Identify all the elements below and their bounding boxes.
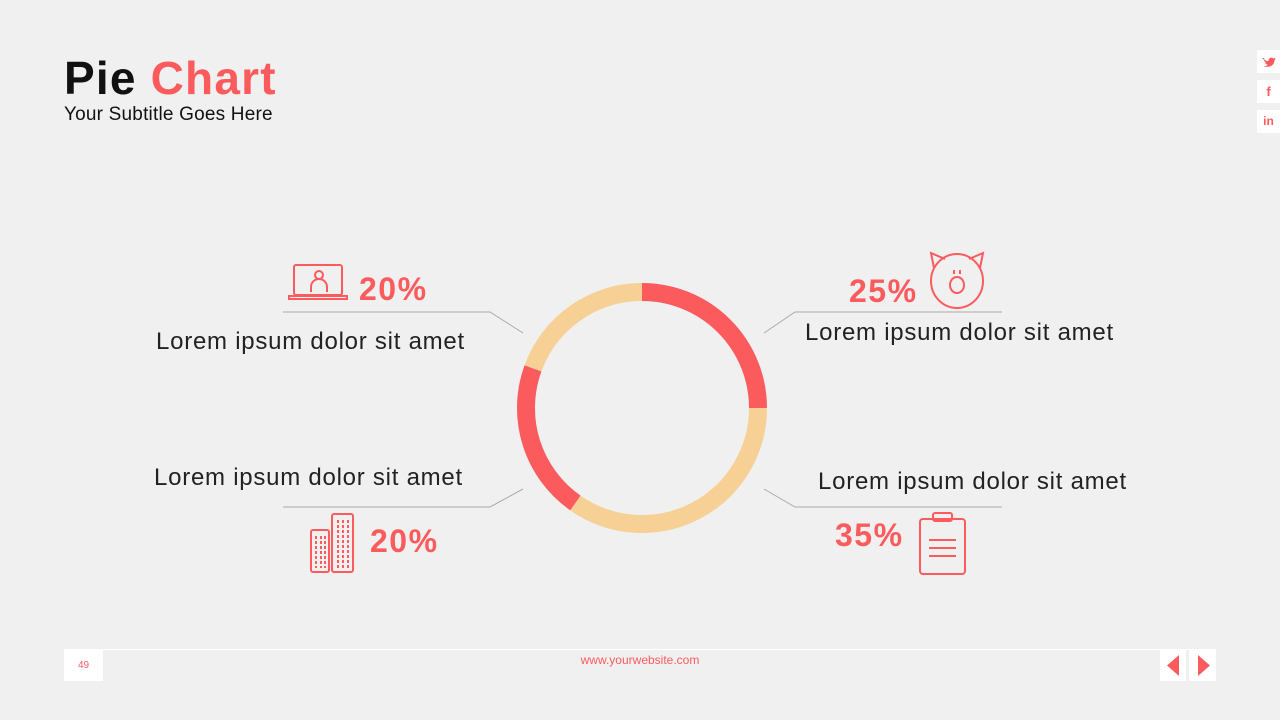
website: www.yourwebsite.com bbox=[581, 653, 699, 667]
icon: laptop bbox=[289, 265, 347, 299]
nav arrows bbox=[1160, 650, 1216, 681]
text: bottom-right: Lorem ipsum dolor sit amet bbox=[818, 468, 1127, 495]
text: top-left: Lorem ipsum dolor sit amet bbox=[156, 328, 465, 355]
text: bottom-left: Lorem ipsum dolor sit amet bbox=[154, 464, 463, 491]
page number bbox=[64, 650, 103, 681]
social: facebook bbox=[1257, 80, 1280, 103]
footer line bbox=[64, 649, 1216, 650]
text: top-right: Lorem ipsum dolor sit amet bbox=[805, 319, 1114, 346]
callout: bottom-left 20%: 20% bbox=[370, 523, 439, 559]
title: Pie Chart bbox=[64, 52, 277, 104]
icon: buildings bbox=[311, 514, 353, 572]
subtitle: Your Subtitle Goes Here bbox=[64, 104, 273, 125]
icon: clipboard bbox=[920, 513, 965, 574]
callout: top-left 20%: 20% bbox=[359, 271, 428, 307]
social: facebook: f bbox=[1266, 84, 1271, 99]
icon: piggy bank bbox=[931, 253, 983, 308]
callout: top-right 25%: 25% bbox=[849, 273, 918, 309]
social: twitter bbox=[1257, 50, 1280, 73]
callout: bottom-right 35%: 35% bbox=[835, 517, 904, 553]
social: linkedin bbox=[1257, 110, 1280, 133]
page number: 49 bbox=[78, 660, 89, 671]
social: linkedin: in bbox=[1263, 114, 1274, 128]
